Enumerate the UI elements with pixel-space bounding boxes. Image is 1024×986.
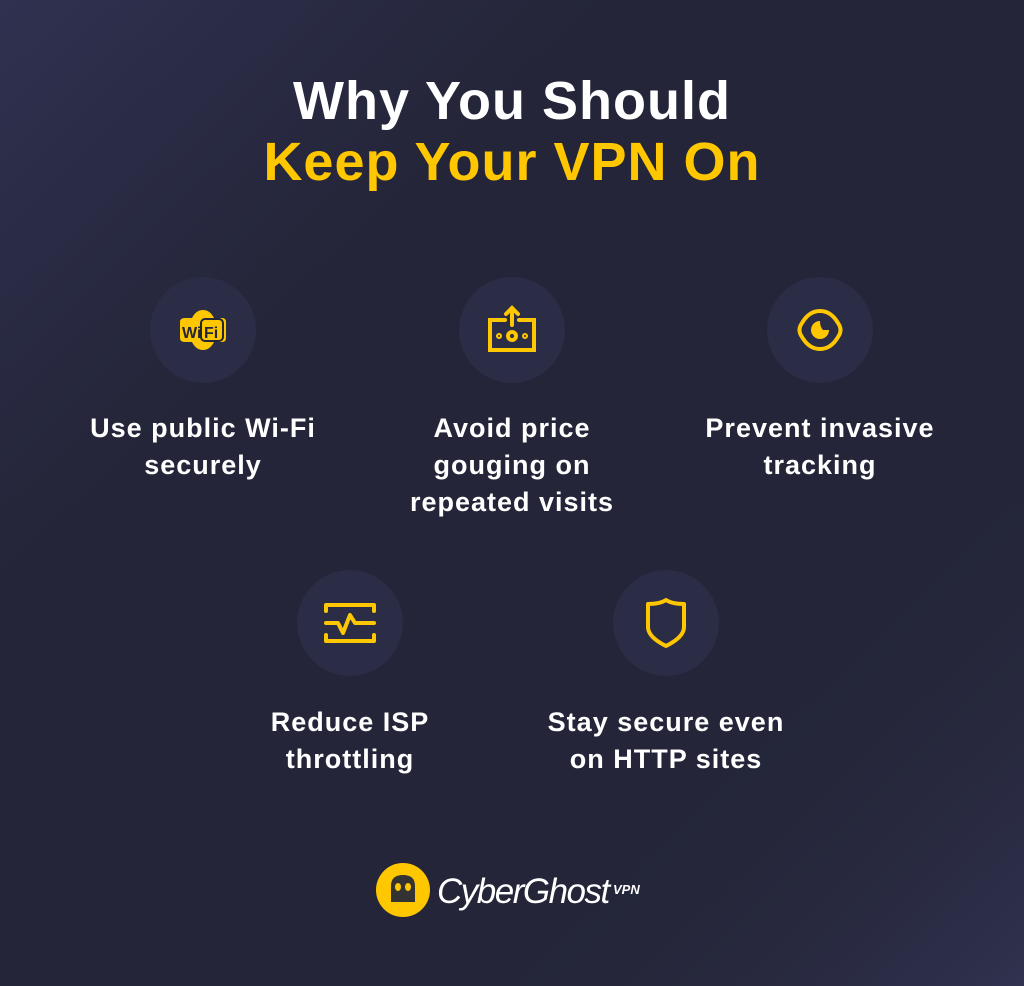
text: price: gouging on	[434, 450, 590, 480]
icon: shield	[613, 570, 719, 676]
icon: wifi	[150, 277, 256, 383]
text: Keep Your VPN On	[263, 132, 761, 192]
text: throttling	[271, 707, 429, 774]
text: tracking: tracking	[763, 450, 877, 480]
icon: throttling	[297, 570, 403, 676]
text: throttling: throttling	[286, 744, 414, 774]
text: tracking: Prevent invasive	[705, 413, 935, 443]
text: http: Stay secure even	[548, 707, 784, 737]
text: price	[410, 413, 614, 517]
text: Why You Should	[293, 71, 731, 131]
text: price: Avoid price	[433, 413, 591, 443]
text: http: on HTTP sites	[570, 744, 762, 774]
logo: CyberGhost	[437, 872, 612, 911]
text: price: repeated visits	[410, 487, 614, 517]
icon: eye	[767, 277, 873, 383]
text: wifi	[90, 413, 316, 480]
text: throttling: Reduce ISP	[271, 707, 429, 737]
title	[263, 71, 761, 192]
icon: wifi: Fi	[204, 325, 218, 342]
logo	[376, 863, 640, 917]
text: http	[548, 707, 784, 774]
text: wifi: Use public Wi-Fi	[90, 413, 316, 443]
logo: VPN	[613, 882, 640, 897]
text: wifi: securely	[144, 450, 262, 480]
icon: wifi: Wi	[182, 325, 201, 342]
icon: price	[459, 277, 565, 383]
text: tracking	[705, 413, 935, 480]
